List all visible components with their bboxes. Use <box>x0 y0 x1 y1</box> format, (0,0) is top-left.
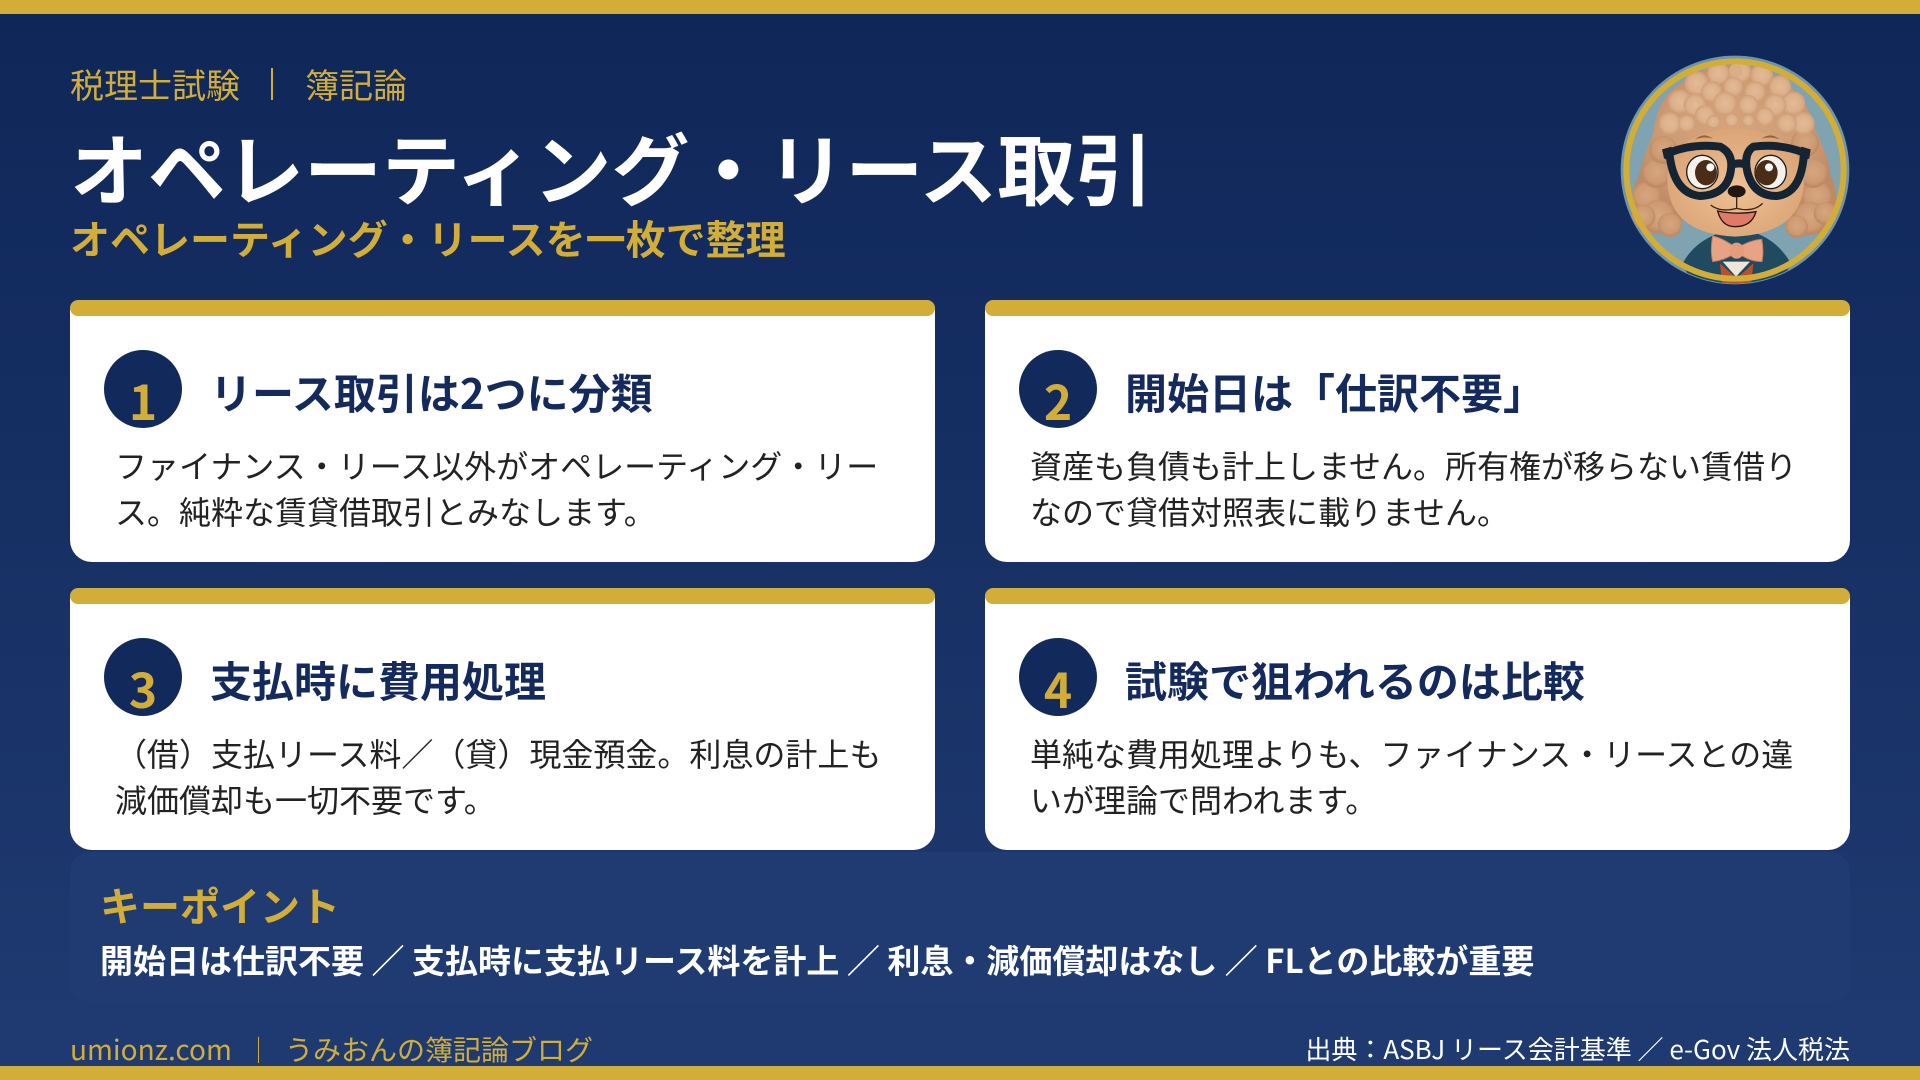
card 4 number <box>1019 638 1097 716</box>
card 4 accent <box>985 588 1850 604</box>
glasses <box>1669 146 1804 196</box>
face <box>1667 128 1804 237</box>
side curls <box>1631 129 1836 238</box>
footer site name: うみおんの簿記論ブログ <box>285 1029 593 1069</box>
card 1 text <box>115 442 878 534</box>
card 3 number: 3 <box>129 652 157 722</box>
footer source: 出典：ASBJ リース会計基準 ／ e-Gov 法人税法 <box>1305 1030 1850 1067</box>
card 1 text: ス。純粋な賃貸借取引とみなします。 <box>115 488 656 534</box>
panel: card 3 <box>70 588 935 850</box>
category label: 簿記論 <box>305 59 407 108</box>
card 1 accent <box>70 300 935 316</box>
icon: mascot avatar <box>1620 56 1850 284</box>
card 4 text: 単純な費用処理よりも、ファイナンス・リースとの違 <box>1030 730 1793 776</box>
card 4 heading: 試験で狙われるのは比較 <box>1125 649 1585 710</box>
card 3 accent <box>70 588 935 604</box>
top gold bar <box>0 0 1920 14</box>
card 1 number: 1 <box>129 364 157 434</box>
card 4 number: 4 <box>1044 652 1072 722</box>
bottom gold bar <box>0 1066 1920 1080</box>
card 3 text: （借）支払リース料／（貸）現金預金。利息の計上も <box>115 730 881 776</box>
top curls <box>1659 60 1815 135</box>
mouth <box>1718 211 1756 227</box>
card 2 number <box>1019 350 1097 428</box>
hair silhouette <box>1633 65 1836 236</box>
card 2 text <box>1030 442 1797 534</box>
card 3 heading: 支払時に費用処理 <box>210 649 546 710</box>
panel: card 4 <box>985 588 1850 850</box>
card 2 number: 2 <box>1044 364 1072 434</box>
footer site name: umionz.com <box>70 1029 232 1069</box>
nose <box>1728 185 1746 197</box>
card 4 text <box>1030 730 1793 822</box>
panel: card 2 <box>985 300 1850 562</box>
card 3 text: 減価償却も一切不要です。 <box>115 776 496 822</box>
panel: card 1 <box>70 300 935 562</box>
card 1 number <box>104 350 182 428</box>
category label <box>70 59 407 108</box>
panel: key point <box>70 852 1850 1003</box>
card 2 text: 資産も負債も計上しません。所有権が移らない賃借り <box>1030 442 1797 488</box>
card 3 number <box>104 638 182 716</box>
key point heading: キーポイント <box>100 875 340 933</box>
eyes <box>1687 155 1718 189</box>
card 4 text: いが理論で問われます。 <box>1030 776 1377 822</box>
bow tie <box>1711 236 1763 262</box>
title: オペレーティング・リース取引 <box>70 110 1153 222</box>
footer site name <box>70 1029 593 1069</box>
subtitle: オペレーティング・リースを一枚で整理 <box>70 208 786 266</box>
key point text: 開始日は仕訳不要 ／ 支払時に支払リース料を計上 ／ 利息・減価償却はなし ／ FLとの比較が重要 <box>100 935 1534 983</box>
card 1 heading: リース取引は2つに分類 <box>210 361 653 422</box>
category label: 税理士試験 <box>70 59 240 108</box>
card 3 text <box>115 730 881 822</box>
card 2 text: なので貸借対照表に載りません。 <box>1030 488 1509 534</box>
card 2 accent <box>985 300 1850 316</box>
jacket <box>1683 234 1791 287</box>
card 1 text: ファイナンス・リース以外がオペレーティング・リー <box>115 442 878 488</box>
top curls over ring <box>1729 64 1743 77</box>
card 2 heading: 開始日は「仕訳不要」 <box>1125 361 1545 422</box>
brows <box>1695 135 1713 139</box>
